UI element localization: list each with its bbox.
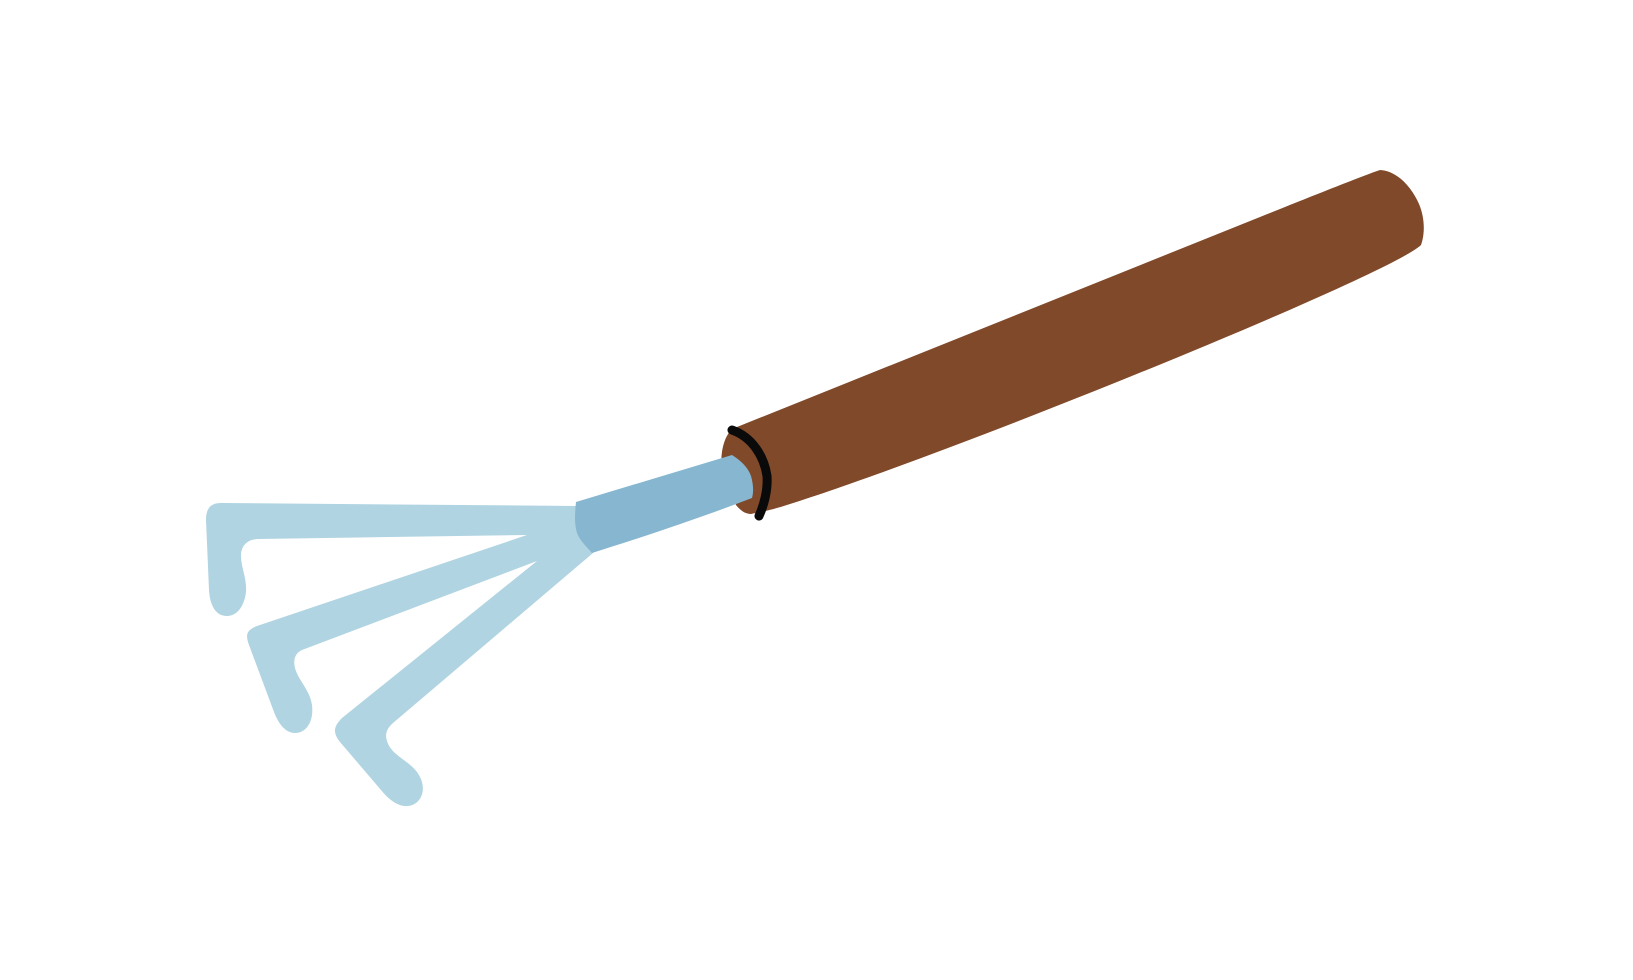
black binding ring [732,430,767,516]
metal neck [575,455,753,553]
rake head with three tines [206,503,600,806]
handle [721,170,1424,514]
